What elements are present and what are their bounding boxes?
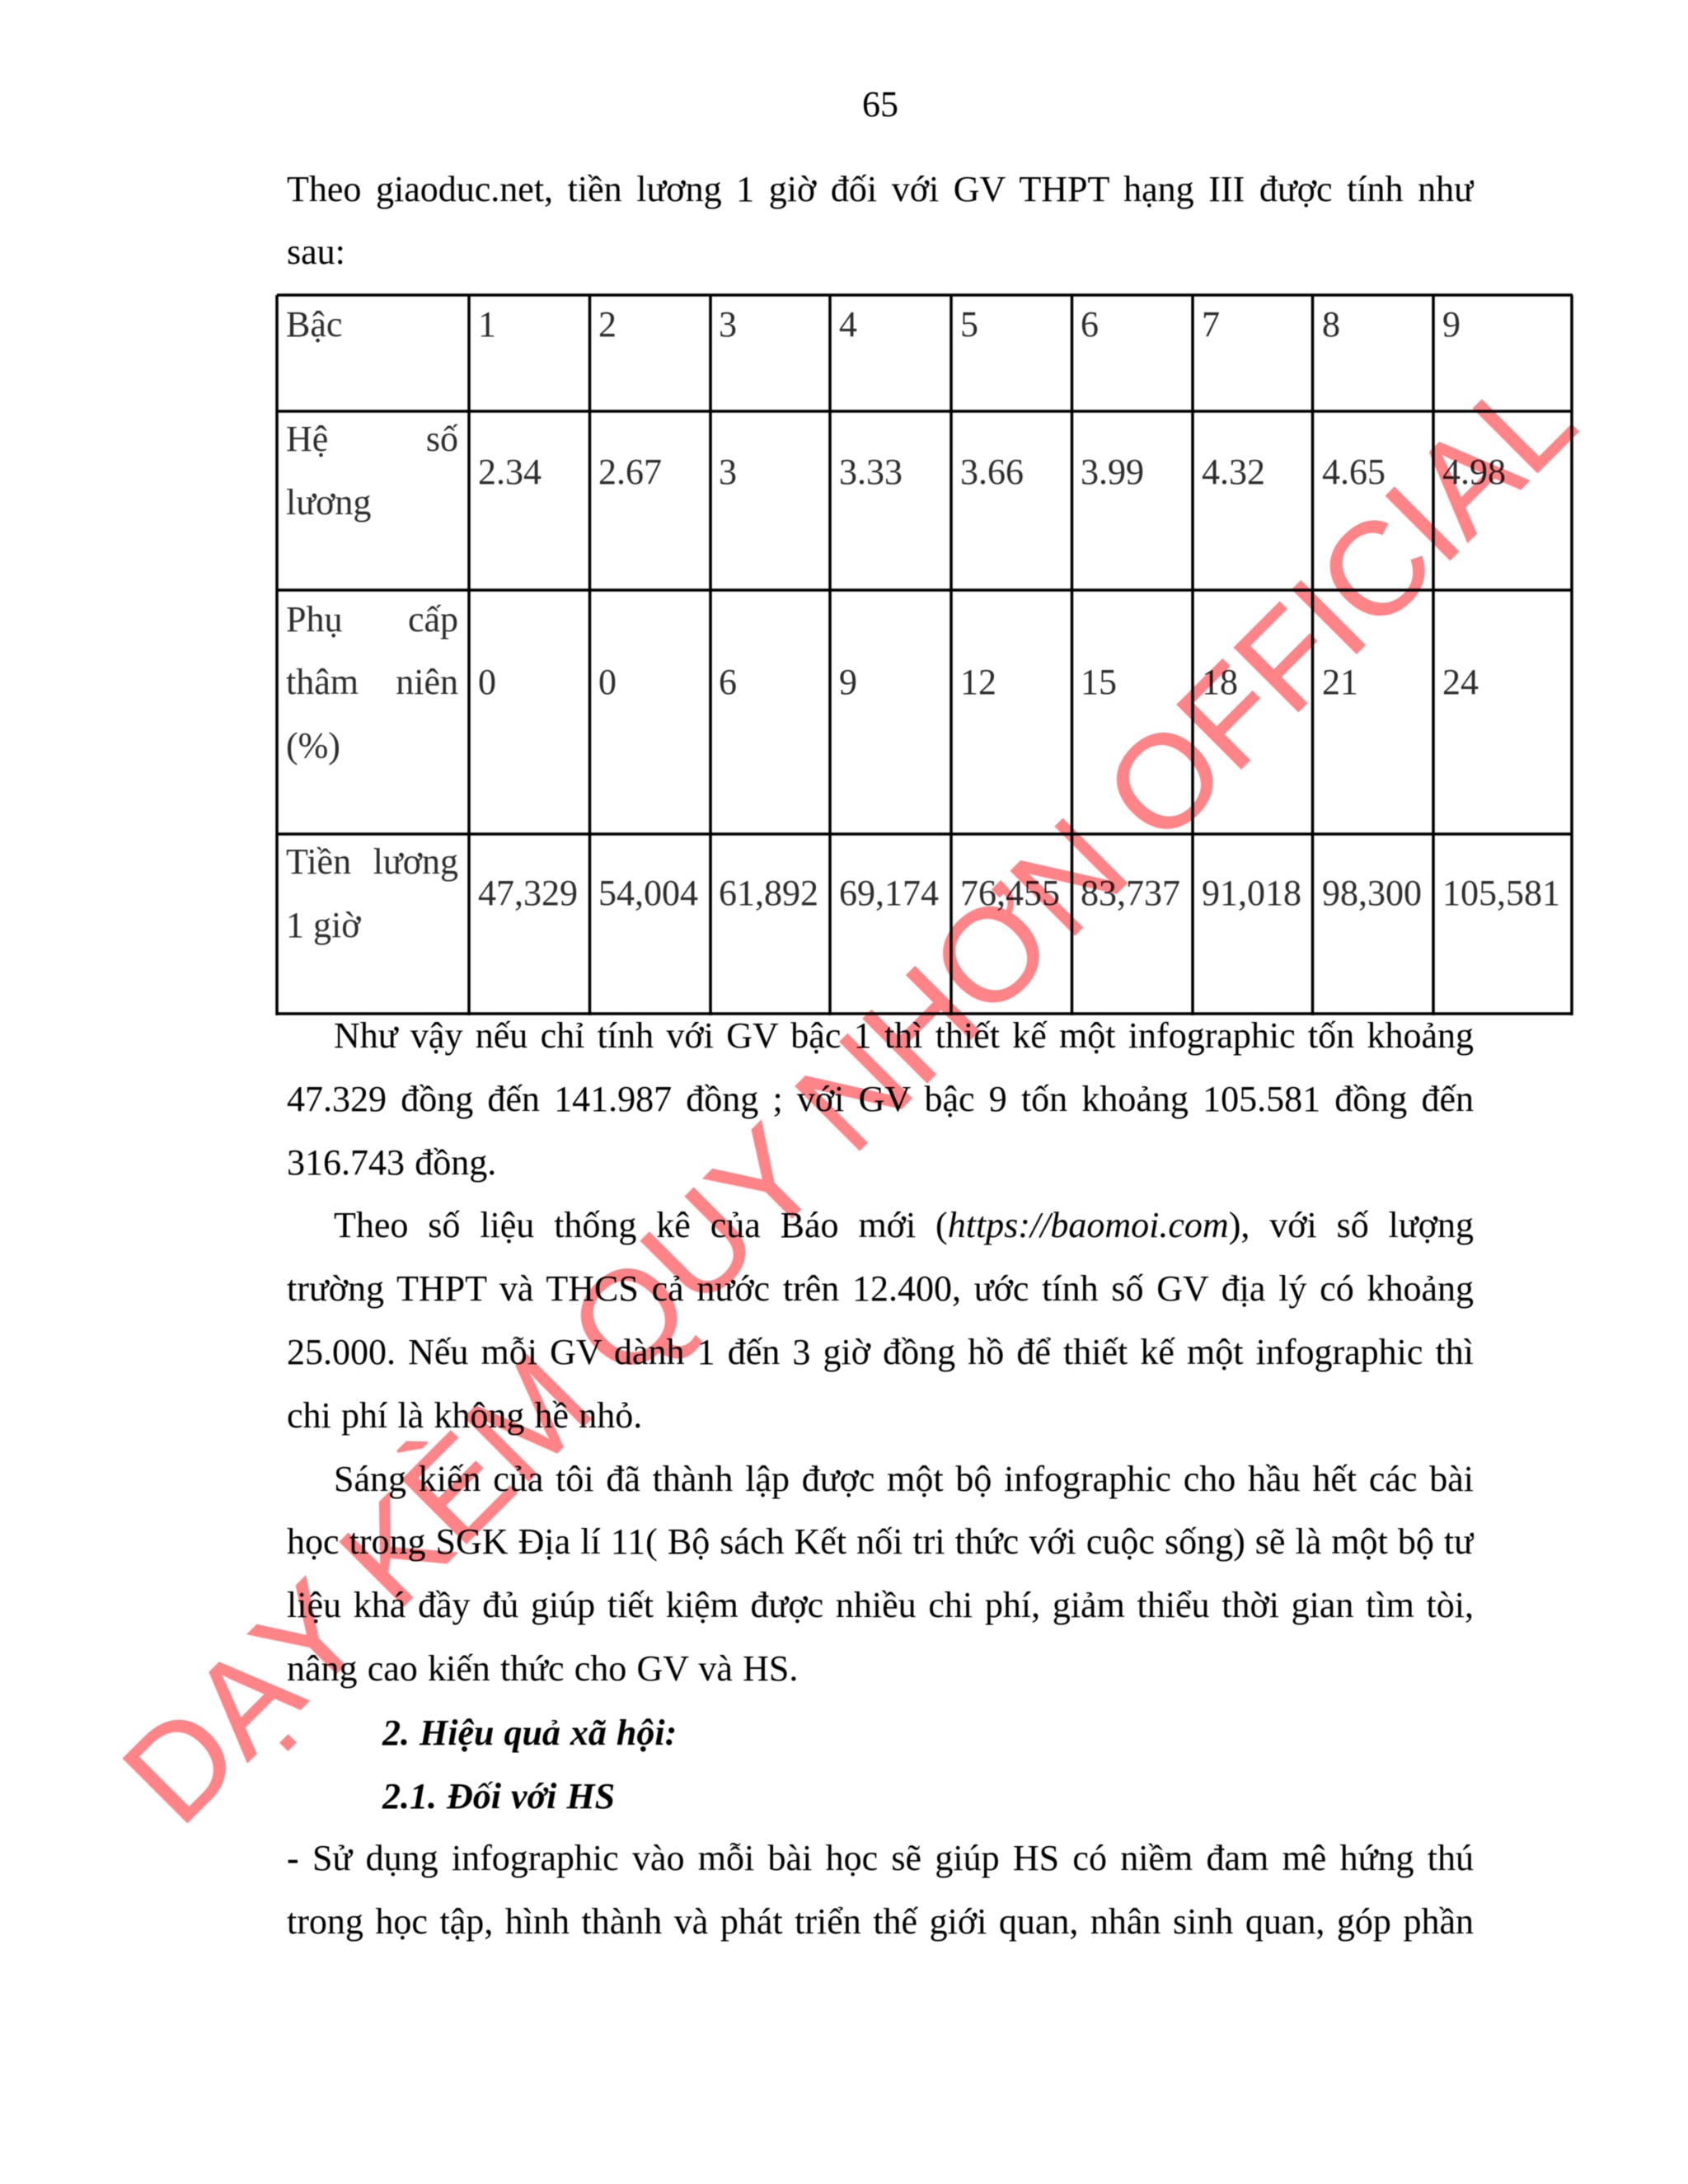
row: Phụ cấp thâm niên: 12 (960, 662, 996, 702)
paragraph: initiative: Sáng kiến của tôi đã thành lập được một bộ infographic cho hầu hết các bài (334, 1459, 1474, 1499)
row: Bậc: Bậc (286, 304, 342, 344)
row: Phụ cấp thâm niên: niên (396, 662, 458, 702)
row: Bậc: 1 (478, 304, 496, 344)
paragraph: statistics: 25.000. Nếu mỗi GV dành 1 đến 3 giờ đồng hồ để thiết kế một infographic thì (287, 1332, 1474, 1372)
row: Hệ số lương (286, 419, 1506, 523)
paragraph: cost per infographic: 47.329 đồng đến 141.987 đồng ; với GV bậc 9 tốn khoảng 105.581 đồng đến (287, 1079, 1474, 1119)
row: Tiền lương 1 giờ: 54,004 (598, 873, 698, 913)
row: Tiền lương 1 giờ: 1 giờ (286, 905, 361, 945)
heading: for students: 2.1. Đối với HS (382, 1776, 615, 1816)
row: Phụ cấp thâm niên (286, 599, 1479, 766)
row: Phụ cấp thâm niên: (%) (286, 725, 340, 766)
row: Hệ số lương: 4.65 (1322, 452, 1386, 492)
paragraph: initiative: liệu khá đầy đủ giúp tiết kiệm được nhiều chi phí, giảm thiểu thời gian tìm tòi, (287, 1585, 1474, 1625)
row: Tiền lương 1 giờ: 76,455 (960, 873, 1060, 913)
body text (287, 1015, 1475, 1942)
paragraph: students: - Sử dụng infographic vào mỗi bài học sẽ giúp HS có niềm đam mê hứng thú (287, 1838, 1474, 1878)
row: Hệ số lương: 3 (719, 452, 737, 492)
paragraph: cost per infographic: 316.743 đồng. (287, 1142, 496, 1183)
row: Tiền lương 1 giờ: 47,329 (478, 873, 578, 913)
paragraph: statistics: chi phí là không hề nhỏ. (287, 1395, 642, 1436)
row: Bậc: 2 (598, 304, 617, 344)
row: Hệ số lương: 3.99 (1081, 452, 1144, 492)
intro paragraph (287, 168, 1475, 272)
row: Hệ số lương: 2.34 (478, 452, 542, 492)
page number: 65 (862, 84, 898, 124)
row: Hệ số lương: 4.98 (1442, 452, 1506, 492)
paragraph: initiative: học trong SGK Địa lí 11( Bộ sách Kết nối tri thức với cuộc sống) sẽ là một bộ tư (287, 1521, 1474, 1562)
row: Tiền lương 1 giờ: lương (373, 841, 458, 882)
row: Tiền lương 1 giờ: 91,018 (1202, 873, 1301, 913)
row: Bậc: 8 (1322, 304, 1340, 344)
row: Bậc: 6 (1081, 304, 1099, 344)
row: Bậc: 7 (1202, 304, 1220, 344)
row: Phụ cấp thâm niên: thâm (286, 662, 359, 702)
paragraph: cost per infographic: Như vậy nếu chỉ tính với GV bậc 1 thì thiết kế một infographic tốn khoảng (334, 1015, 1474, 1056)
row: Hệ số lương: 4.32 (1202, 452, 1265, 492)
row: Bậc: 5 (960, 304, 978, 344)
row: Phụ cấp thâm niên: cấp (408, 599, 458, 640)
row: Phụ cấp thâm niên: 21 (1322, 662, 1358, 702)
intro paragraph: sau: (287, 232, 345, 272)
paragraph: students (287, 1838, 1474, 1942)
paragraph: initiative (287, 1459, 1475, 1690)
paragraph: statistics (287, 1205, 1474, 1436)
row: Bậc: 9 (1442, 304, 1461, 344)
intro paragraph: Theo giaoduc.net, tiền lương 1 giờ đối với GV THPT hạng III được tính như (287, 168, 1474, 209)
row: Phụ cấp thâm niên: 15 (1081, 662, 1117, 702)
row: Phụ cấp thâm niên: 6 (719, 662, 737, 702)
paragraph: cost per infographic (287, 1015, 1474, 1183)
row: Phụ cấp thâm niên: 9 (839, 662, 857, 702)
row: Tiền lương 1 giờ: 83,737 (1081, 873, 1180, 913)
paragraph: students: trong học tập, hình thành và phát triển thế giới quan, nhân sinh quan, góp phần (287, 1901, 1474, 1942)
watermark: DẠY KÈM QUY NHƠN OFFICIAL (96, 344, 1602, 1851)
row: Tiền lương 1 giờ: 105,581 (1442, 873, 1560, 913)
row: Hệ số lương: 3.66 (960, 452, 1024, 492)
row: Hệ số lương: lương (286, 482, 371, 523)
row: Hệ số lương: số (426, 419, 458, 459)
row: Hệ số lương: 2.67 (598, 452, 662, 492)
row: Phụ cấp thâm niên: 24 (1442, 662, 1479, 702)
row: Bậc: 4 (839, 304, 857, 344)
row: Bậc (286, 304, 1461, 344)
row: Tiền lương 1 giờ: Tiền (286, 841, 351, 882)
row: Tiền lương 1 giờ: 69,174 (839, 873, 939, 913)
row: Phụ cấp thâm niên: 0 (598, 662, 617, 702)
heading: social effectiveness: 2. Hiệu quả xã hội: (382, 1713, 677, 1753)
row: Hệ số lương: Hệ (286, 419, 328, 459)
salary table (274, 293, 1574, 1016)
paragraph: statistics: Theo số liệu thống kê của Báo mới (https://baomoi.com), với số lượng (334, 1205, 1474, 1245)
row: Tiền lương 1 giờ: 98,300 (1322, 873, 1422, 913)
row: Phụ cấp thâm niên: 0 (478, 662, 496, 702)
row: Phụ cấp thâm niên: 18 (1202, 662, 1238, 702)
row: Hệ số lương: 3.33 (839, 452, 903, 492)
row: Phụ cấp thâm niên: Phụ (286, 599, 342, 640)
row: Tiền lương 1 giờ (286, 841, 1560, 945)
paragraph: statistics: trường THPT và THCS cả nước trên 12.400, ước tính số GV địa lý có khoảng (287, 1268, 1474, 1309)
row: Bậc: 3 (719, 304, 737, 344)
paragraph: initiative: nâng cao kiến thức cho GV và HS. (287, 1648, 798, 1689)
row: Tiền lương 1 giờ: 61,892 (719, 873, 818, 913)
